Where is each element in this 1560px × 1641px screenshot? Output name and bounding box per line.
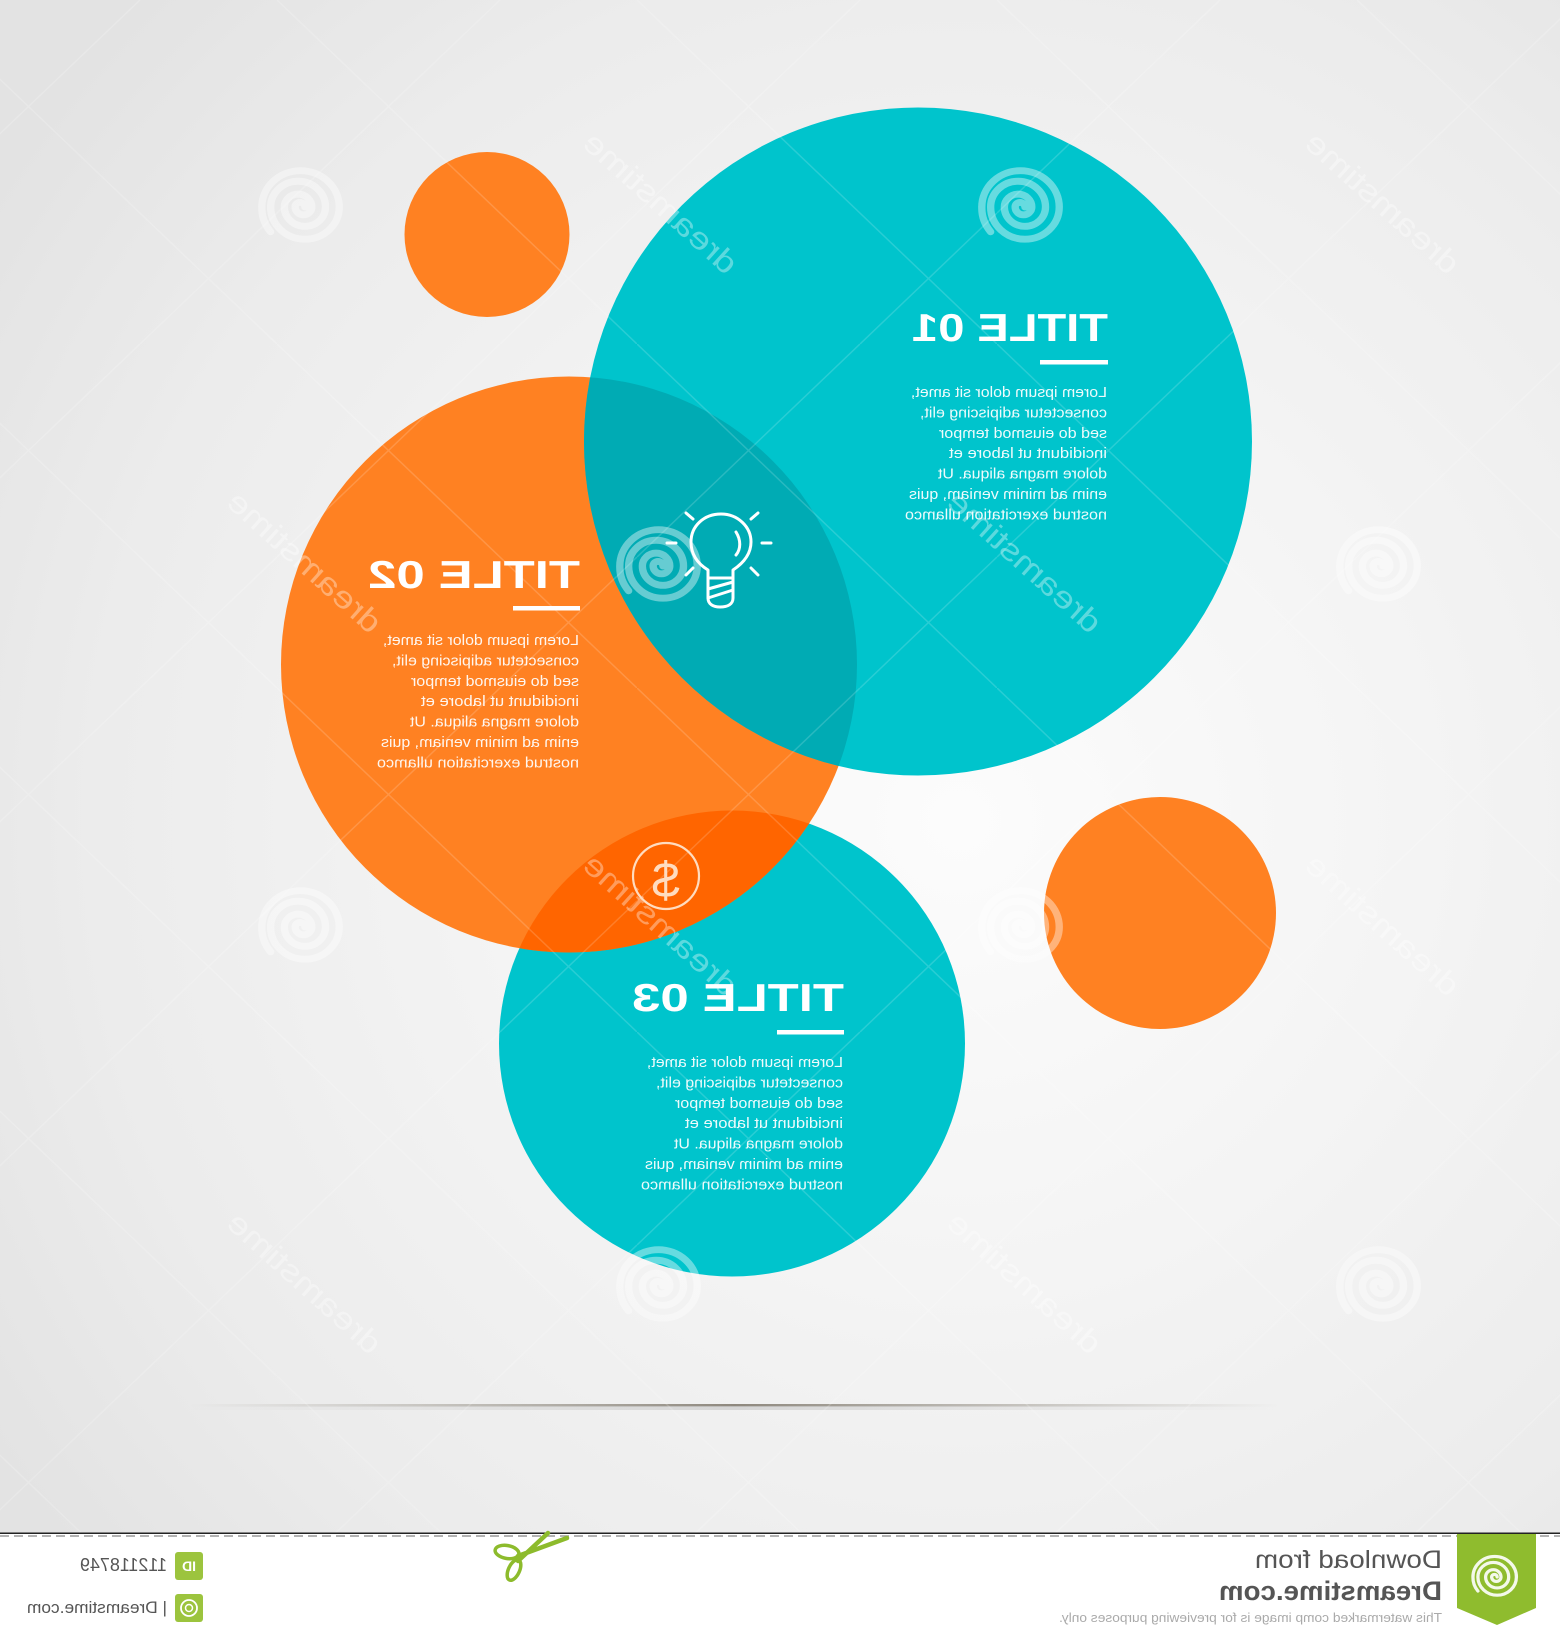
icon: light bulb: [667, 513, 771, 607]
watermark dreamstime wordmarks: [220, 125, 1467, 1361]
body text: title 03: incididunt ut labore et: [684, 1115, 843, 1132]
watermark dreamstime wordmarks: dreamstime: [576, 847, 745, 1003]
body text: title 03: sed do eiusmod tempor: [675, 1095, 843, 1112]
teal circle 3: [499, 810, 965, 1276]
icon: dollar coin: $: [652, 852, 680, 908]
watermark dreamstime wordmarks: dreamstime: [220, 484, 389, 640]
body text: title 02: sed do eiusmod tempor: [411, 673, 579, 690]
teal circle 1: [584, 108, 1252, 776]
body text: title 01: Lorem ipsum dolor sit amet,: [911, 384, 1107, 401]
body text: title 02: Lorem ipsum dolor sit amet,: [383, 632, 579, 649]
small orange circle right: [1044, 797, 1276, 1029]
body text: title 03: enim ad minim veniam, quis: [645, 1156, 843, 1173]
icon: id badge: ID: [182, 1558, 196, 1574]
icon: download ribbon: [1457, 1534, 1536, 1625]
divider: title 01: [1040, 360, 1108, 364]
watermark dreamstime wordmarks: dreamstime: [1298, 125, 1467, 281]
body text: title 02: consectetur adipiscing elit,: [392, 652, 579, 669]
overlap of orange circle and teal circle 1: [584, 377, 857, 766]
watermark spirals: [262, 171, 1417, 1318]
divider: title 02: [513, 606, 580, 610]
text: dreamstime.com: Dreamstime.com: [1219, 1576, 1442, 1606]
body text: title 01: consectetur adipiscing elit,: [920, 404, 1107, 421]
body text: title 03: consectetur adipiscing elit,: [656, 1074, 843, 1091]
text: watermark notice: This watermarked comp image is for previewing purposes only.: [1059, 1610, 1442, 1625]
body text: title 02: dolore magna aliqua. Ut: [409, 714, 579, 731]
overlap of orange circle and teal circle 3: [520, 810, 809, 952]
divider: title 03: [777, 1030, 844, 1034]
text: download from: Download from: [1255, 1546, 1442, 1574]
copyright row: [27, 1594, 203, 1622]
download text block: [1059, 1546, 1442, 1625]
body text: title 01: nostrud exercitation ullamco: [905, 506, 1107, 523]
footer background: [0, 1533, 1560, 1641]
heading: title 02: TITLE 02: [368, 554, 580, 597]
text: image id: 112118749: [80, 1555, 167, 1575]
icon: scissors: [494, 1533, 567, 1582]
body text: title 03: Lorem ipsum dolor sit amet,: [647, 1054, 843, 1071]
panel: title 01: [905, 307, 1108, 523]
floor shadow line: [190, 1404, 1280, 1410]
body text: title 02: enim ad minim veniam, quis: [381, 734, 579, 751]
body text: title 02: nostrud exercitation ullamco: [377, 754, 579, 771]
body text: title 01: dolore magna aliqua. Ut: [937, 466, 1107, 483]
heading: title 03: TITLE 03: [632, 977, 844, 1020]
body text: title 01: [905, 384, 1107, 523]
body text: title 02: incididunt ut labore et: [420, 693, 579, 710]
body text: title 03: [641, 1054, 843, 1193]
watermark dreamstime wordmarks: dreamstime: [940, 1205, 1109, 1361]
heading: title 01: TITLE 01: [912, 307, 1108, 350]
icon: dollar coin: [633, 843, 699, 909]
orange circle 2: [281, 376, 857, 952]
watermark dreamstime wordmarks: dreamstime: [576, 125, 745, 281]
body text: title 03: nostrud exercitation ullamco: [641, 1176, 843, 1193]
body text: title 01: incididunt ut labore et: [948, 445, 1107, 462]
icon: copyright badge: [175, 1594, 203, 1622]
body text: title 03: dolore magna aliqua. Ut: [673, 1136, 843, 1153]
body text: title 01: enim ad minim veniam, quis: [909, 486, 1107, 503]
text: dreamstime credit: | Dreamstime.com: [27, 1598, 167, 1617]
body text: title 02: [377, 632, 579, 771]
image id row: [80, 1552, 203, 1580]
body text: title 01: sed do eiusmod tempor: [939, 425, 1107, 442]
panel: title 02: [368, 554, 580, 771]
panel: title 03: [632, 977, 844, 1193]
footer cut line: [0, 1532, 1560, 1536]
watermark dreamstime wordmarks: dreamstime: [1298, 847, 1467, 1003]
watermark dreamstime wordmarks: dreamstime: [940, 484, 1109, 640]
watermark dreamstime wordmarks: dreamstime: [220, 1205, 389, 1361]
small orange circle top: [404, 152, 570, 317]
